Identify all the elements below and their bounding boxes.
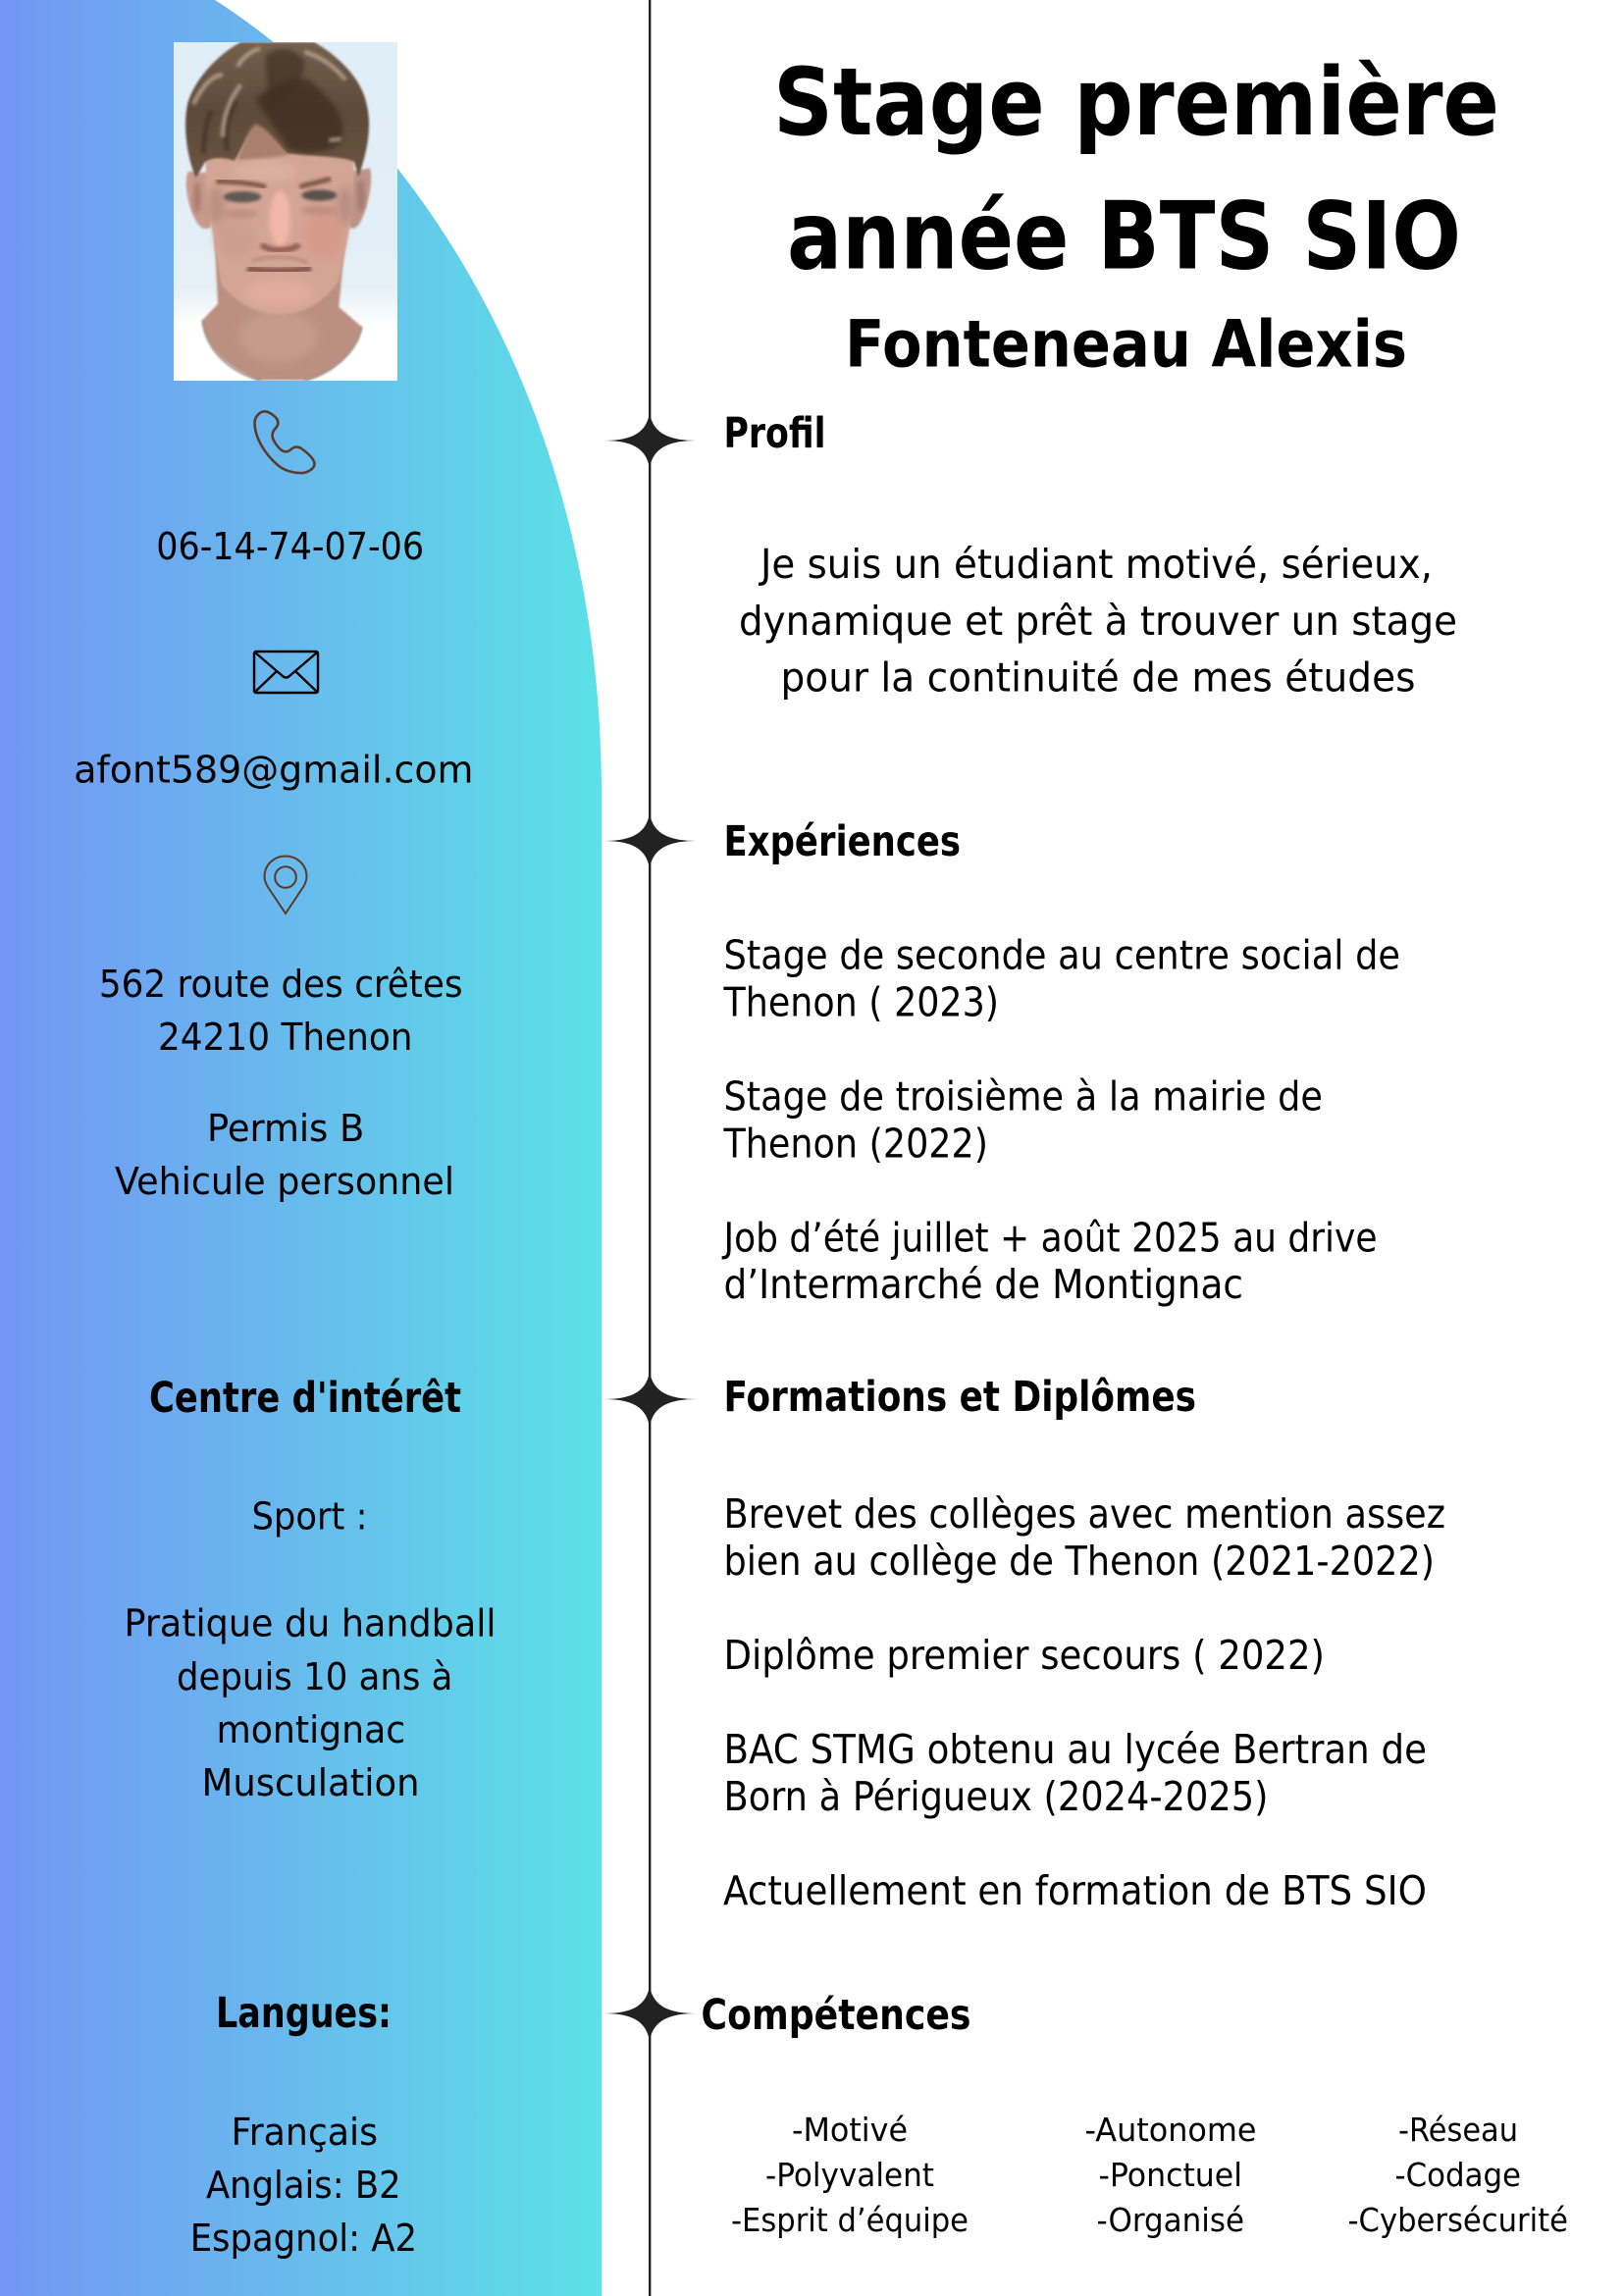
- text: diploma 3: BAC STMG obtenu au lycée Bertran de: [724, 1726, 1427, 1773]
- text: interests: [124, 1601, 497, 1804]
- text: profile: Je suis un étudiant motivé, sérieux,: [758, 541, 1433, 588]
- text: profile: [739, 541, 1457, 701]
- list: technical skills column 3: [1348, 2111, 1568, 2239]
- driving licence: [115, 1107, 454, 1203]
- driving licence: Vehicule personnel: [115, 1160, 454, 1203]
- list: soft skills column 1: -Polyvalent: [765, 2156, 934, 2194]
- text: experience 3: d’Intermarché de Montignac: [724, 1261, 1243, 1308]
- text: diploma 1: [724, 1490, 1445, 1585]
- list: soft skills column 2: -Ponctuel: [1099, 2156, 1242, 2194]
- address: [99, 963, 463, 1059]
- text: languages: Anglais: B2: [206, 2164, 401, 2207]
- title: année BTS SIO: [787, 183, 1461, 290]
- list: soft skills column 2: -Autonome: [1085, 2111, 1256, 2149]
- text: profile: pour la continuité de mes études: [781, 653, 1415, 701]
- text: profile: dynamique et prêt à trouver un stage: [739, 598, 1457, 645]
- text: experience 2: Thenon (2022): [723, 1121, 988, 1168]
- list: technical skills column 3: -Codage: [1395, 2156, 1521, 2194]
- heading: Profil: Profil: [724, 409, 826, 458]
- text: interests: depuis 10 ans à: [177, 1655, 452, 1698]
- brows and eyes: [216, 182, 266, 186]
- driving licence: Permis B: [207, 1107, 364, 1150]
- icon: timeline star Expériences: [603, 812, 697, 869]
- heading: Formations et Diplômes: Formations et Diplômes: [724, 1373, 1196, 1422]
- text: diploma 2: Diplôme premier secours ( 2022): [724, 1632, 1325, 1679]
- hair: [185, 42, 369, 178]
- text: diploma 1: Brevet des collèges avec mention assez: [724, 1490, 1445, 1538]
- text: experience 2: [723, 1073, 1323, 1168]
- text: experience 1: Thenon ( 2023): [723, 979, 999, 1026]
- text: languages: Français: [232, 2111, 378, 2154]
- phone number: 06-14-74-07-06: [156, 525, 424, 568]
- text: experience 3: [721, 1215, 1378, 1308]
- title: Stage première: [773, 49, 1499, 157]
- text: interests: montignac: [216, 1708, 405, 1751]
- icon: location pin: [265, 856, 306, 913]
- heading: Expériences: Expériences: [724, 817, 961, 866]
- list: technical skills column 3: -Cybersécurité: [1348, 2201, 1568, 2239]
- text: interests: Musculation: [202, 1761, 420, 1804]
- list: technical skills column 3: -Réseau: [1398, 2111, 1518, 2149]
- ears: [186, 172, 211, 229]
- icon: timeline star Formations: [603, 1371, 697, 1428]
- text: languages: [190, 2111, 417, 2260]
- text: sport: Sport :: [251, 1495, 367, 1539]
- address: 24210 Thenon: [158, 1016, 412, 1059]
- icon: phone: [255, 411, 314, 473]
- name: Fonteneau Alexis: [845, 306, 1407, 383]
- text: languages: Espagnol: A2: [190, 2217, 417, 2260]
- list: soft skills column 2: [1085, 2111, 1256, 2239]
- address: 562 route des crêtes: [99, 963, 463, 1006]
- text: interests: Pratique du handball: [124, 1601, 497, 1644]
- nose and mouth: [261, 244, 299, 250]
- heading: Compétences: Compétences: [701, 1991, 971, 2040]
- portrait photo: [174, 42, 397, 381]
- list: soft skills column 2: -Organisé: [1097, 2201, 1244, 2239]
- text: experience 1: Stage de seconde au centre social de: [724, 932, 1400, 979]
- title: [773, 49, 1499, 290]
- email: afont589@gmail.com: [74, 748, 473, 791]
- text: diploma 1: bien au collège de Thenon (2021-2022): [724, 1538, 1435, 1585]
- text: experience 3: Job d’été juillet + août 2025 au drive: [721, 1215, 1378, 1262]
- vertical timeline line: [649, 0, 651, 2296]
- text: diploma 3: Born à Périgueux (2024-2025): [724, 1773, 1268, 1820]
- text: current training: Actuellement en formation de BTS SIO: [723, 1867, 1427, 1914]
- face: [205, 118, 355, 314]
- list: soft skills column 1: -Motivé: [792, 2111, 908, 2149]
- panel: left gradient sidebar: [0, 0, 602, 2296]
- icon: envelope: [254, 652, 318, 693]
- list: soft skills column 1: -Esprit d’équipe: [731, 2201, 969, 2239]
- text: experience 2: Stage de troisième à la mairie de: [724, 1073, 1323, 1121]
- text: diploma 3: [724, 1726, 1427, 1820]
- icon: timeline star Profil: [603, 412, 697, 469]
- heading: Langues: Langues:: [216, 1989, 392, 2038]
- list: soft skills column 1: [731, 2111, 969, 2239]
- text: experience 1: [723, 932, 1400, 1026]
- icon: timeline star Compétences: [603, 1985, 697, 2042]
- heading: Centre d'intérêt: Centre d'intérêt: [149, 1374, 461, 1423]
